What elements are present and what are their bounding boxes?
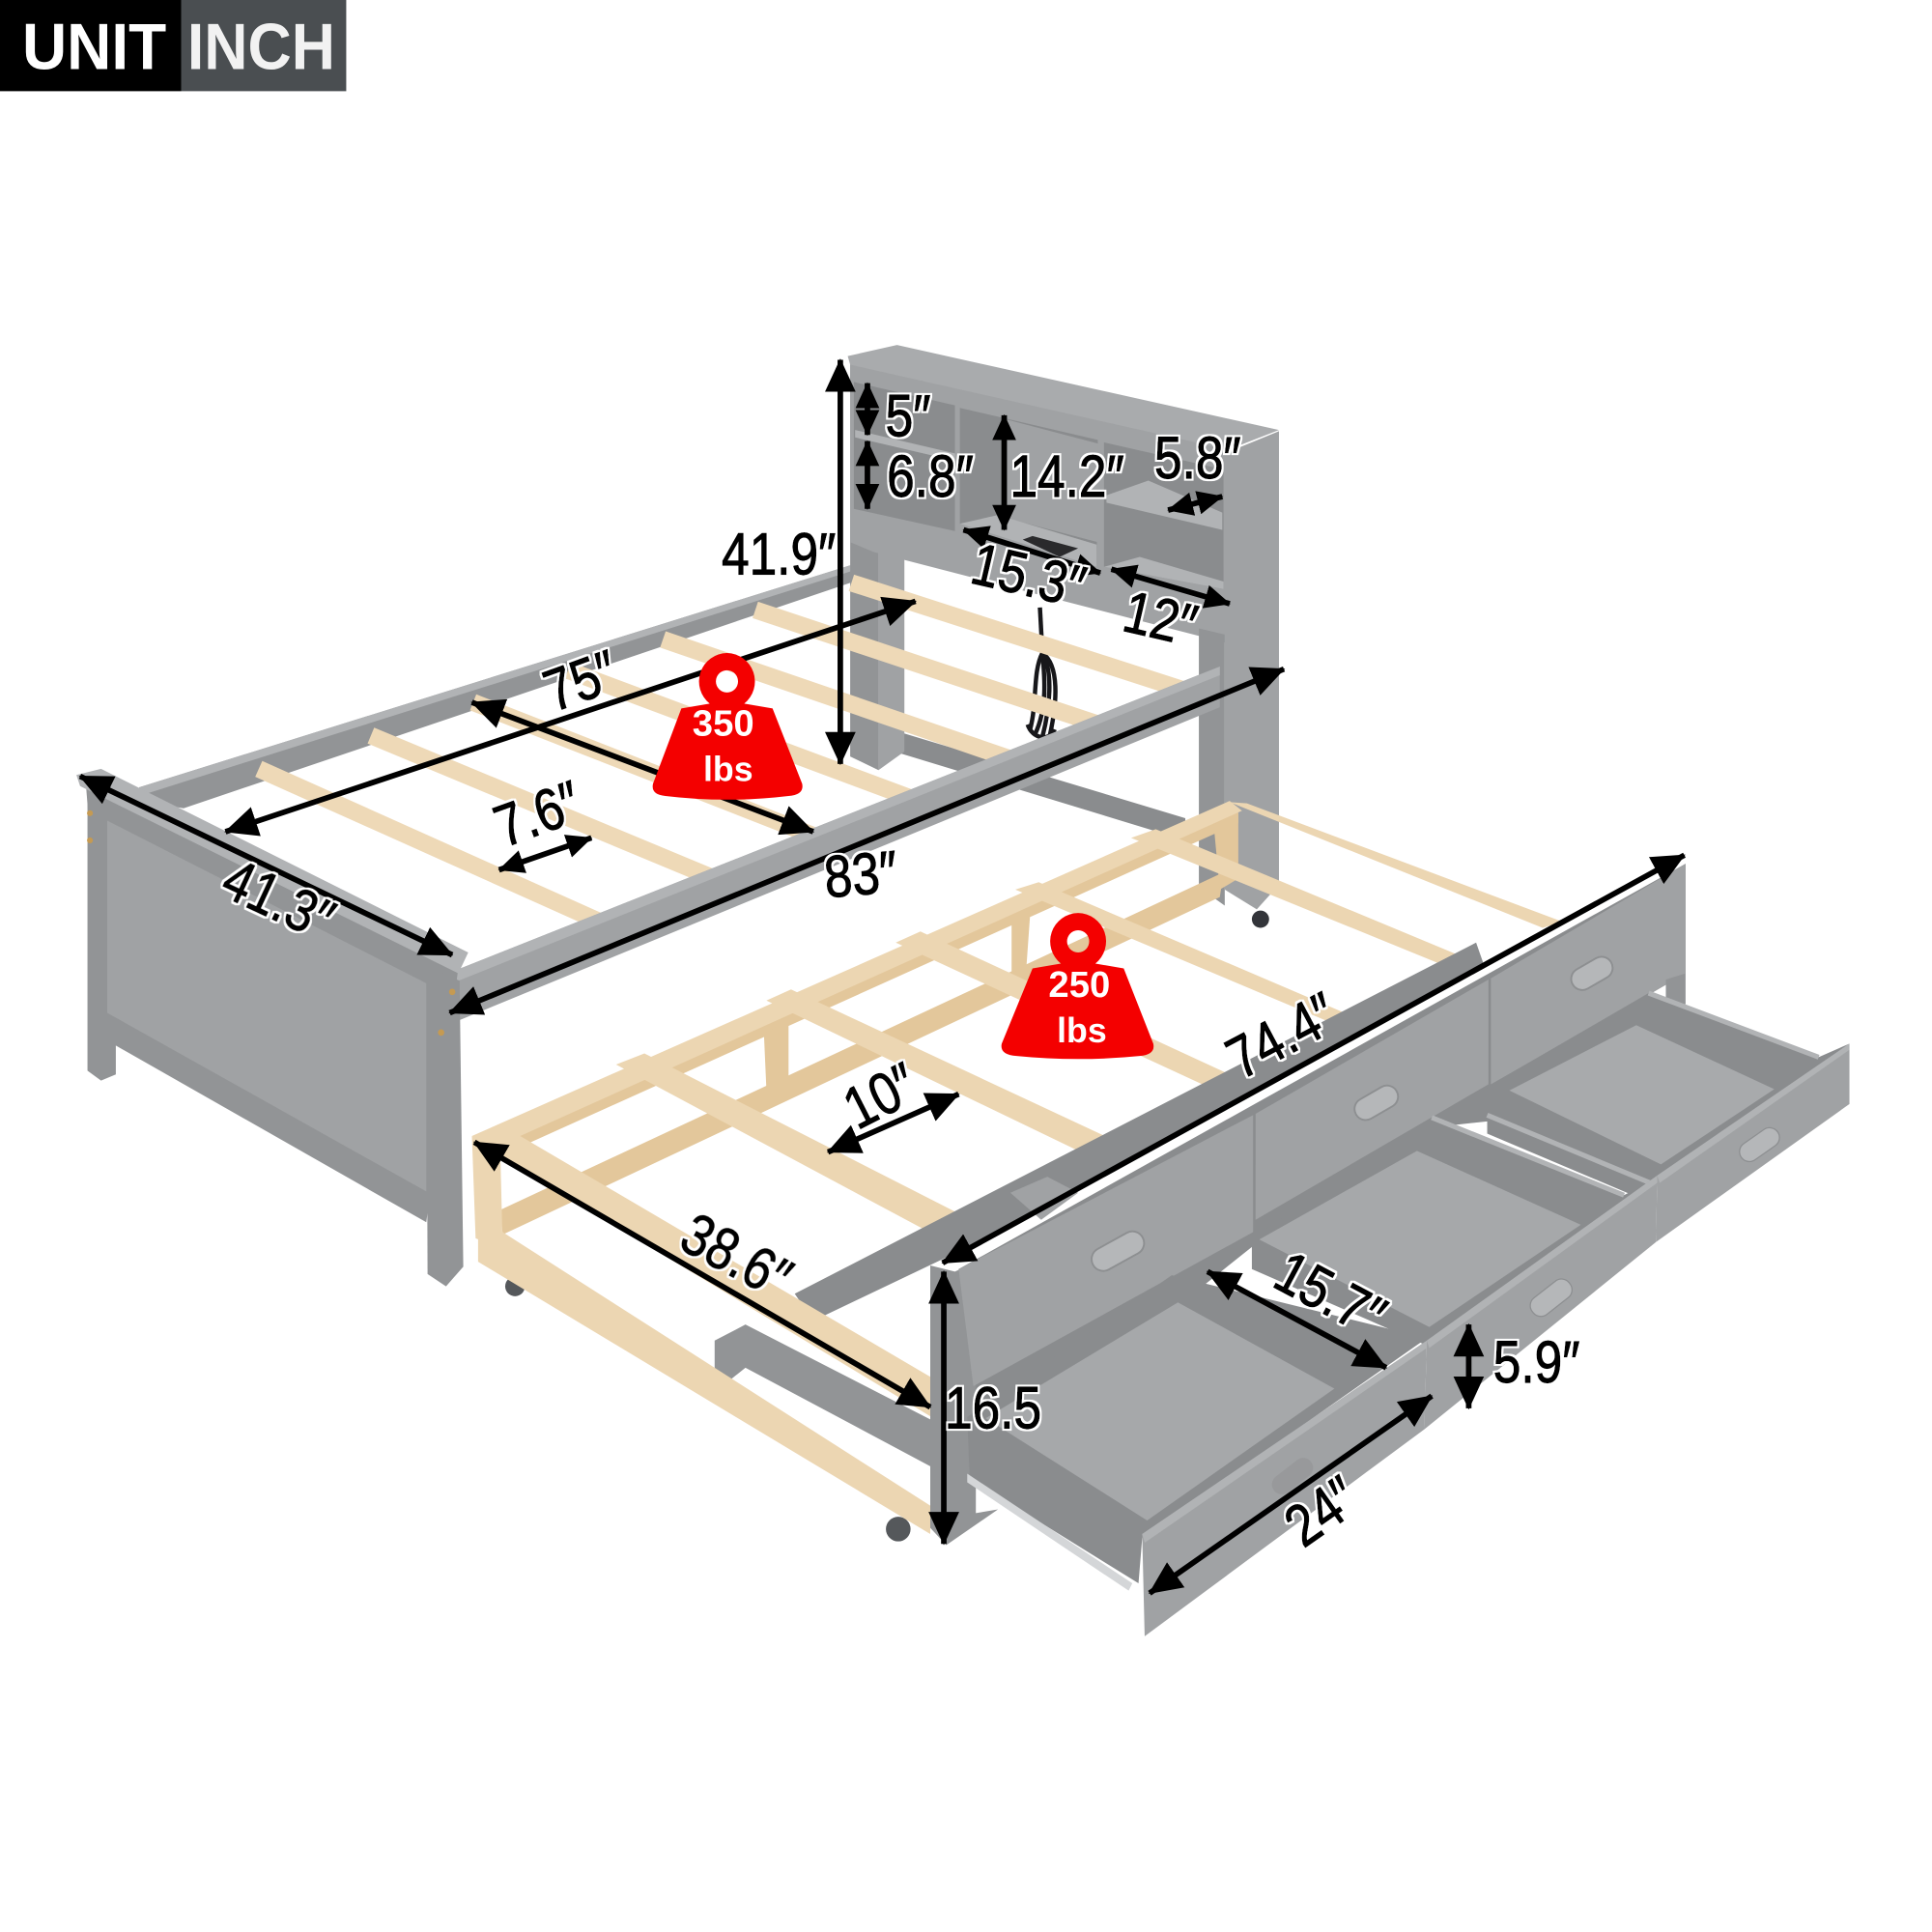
dimension labels: 15.7″ bbox=[1264, 1238, 1396, 1350]
dimension labels: 5.8″ bbox=[1154, 425, 1241, 491]
weight badge 250 lbs bbox=[1002, 913, 1153, 1059]
dimension labels: 5.9″ bbox=[1493, 1329, 1579, 1395]
drawer unit fixed front bbox=[930, 864, 1686, 1545]
dimension labels: 14.2″ bbox=[1009, 443, 1124, 509]
drawer one bbox=[967, 1275, 1427, 1636]
headboard with bookcase bbox=[848, 345, 1279, 909]
dimension labels: 41.9″ bbox=[722, 521, 836, 586]
drawer three bbox=[1488, 993, 1850, 1242]
dimension labels: 74.4″ bbox=[1216, 980, 1348, 1092]
dimension labels bbox=[213, 383, 1579, 1559]
charging socket bbox=[1023, 536, 1078, 557]
near side rail bbox=[451, 667, 1220, 1023]
dimension labels: 83″ bbox=[821, 838, 900, 910]
weight badge 250 lbs: 250 bbox=[1048, 964, 1110, 1006]
far side rail bbox=[139, 562, 862, 809]
unit badge: UNIT bbox=[22, 11, 166, 83]
unit badge bbox=[0, 0, 346, 91]
dimension labels: 6.8″ bbox=[887, 443, 974, 509]
dimension labels: 24″ bbox=[1273, 1463, 1370, 1559]
dimension labels: 38.6″ bbox=[670, 1200, 803, 1312]
dimension labels: 75″ bbox=[535, 638, 626, 724]
dimension labels: 15.3″ bbox=[965, 530, 1092, 620]
drawer two bbox=[1252, 1118, 1658, 1430]
footboard bbox=[76, 769, 469, 1287]
unit badge: INCH bbox=[187, 11, 335, 83]
dimension labels: 16.5 bbox=[945, 1375, 1041, 1440]
dimension labels: 5″ bbox=[886, 383, 930, 449]
power cord bbox=[1028, 608, 1056, 737]
weight badge 250 lbs: lbs bbox=[1057, 1011, 1107, 1050]
weight badge 350 lbs: lbs bbox=[703, 751, 753, 789]
trundle side wood rails bbox=[474, 1128, 931, 1534]
dimension labels: 7.6″ bbox=[486, 768, 589, 860]
weight badge 350 lbs bbox=[653, 653, 803, 800]
dimension arrows bbox=[80, 359, 1685, 1593]
weight badge 350 lbs: 350 bbox=[693, 702, 754, 744]
main bed slats bbox=[259, 582, 1191, 929]
trundle casters bbox=[505, 911, 1269, 1542]
dimension labels: 12″ bbox=[1118, 578, 1204, 659]
grey trundle back rail bbox=[715, 943, 1485, 1466]
dimension labels: 10″ bbox=[833, 1050, 927, 1142]
trundle wooden frame bbox=[472, 801, 1562, 1249]
dimension labels: 41.3″ bbox=[213, 845, 344, 953]
